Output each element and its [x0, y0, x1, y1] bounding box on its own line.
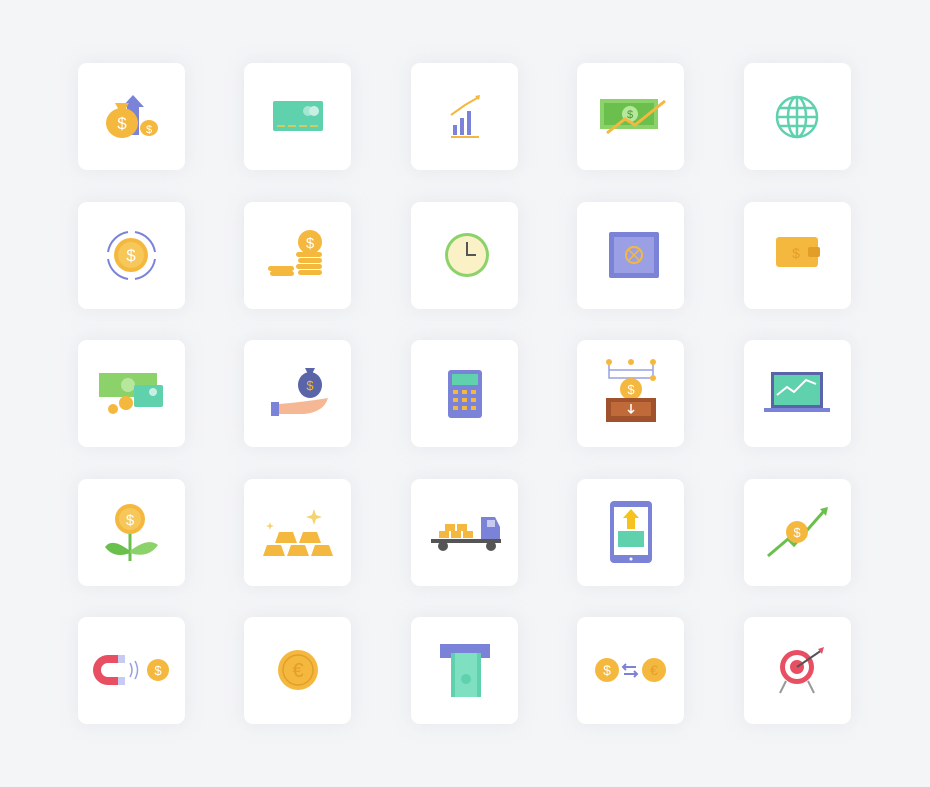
icon: magnet: $ — [154, 663, 162, 678]
icon: coin trend: $ — [793, 525, 801, 540]
icon: money bags: $ — [117, 114, 127, 133]
icon: coin cycle: $ — [126, 246, 136, 265]
card: banknote growth — [577, 63, 684, 170]
icon: cash and card — [99, 373, 163, 414]
icon: exchange: $ — [603, 662, 611, 678]
card: gold truck — [411, 479, 518, 586]
icon: money bags — [106, 95, 158, 138]
card: ATM cash — [411, 617, 518, 724]
icon: coin stacks: $ — [306, 235, 315, 252]
card: currency exchange — [577, 617, 684, 724]
card: coin cycle — [78, 202, 185, 309]
card: credit card — [244, 63, 351, 170]
icon: clock — [445, 233, 489, 277]
icon: truck — [431, 517, 501, 551]
icon: banknote: $ — [627, 109, 633, 121]
card: calculator — [411, 340, 518, 447]
card: euro coin — [244, 617, 351, 724]
card: phone deposit — [577, 479, 684, 586]
card: money bags growth — [78, 63, 185, 170]
icon: chart — [451, 95, 480, 137]
icon: laptop — [764, 372, 830, 412]
icon: exchange — [595, 658, 666, 682]
icon: money bags: $ — [146, 124, 152, 136]
card: laptop chart — [744, 340, 851, 447]
card: clock — [411, 202, 518, 309]
icon: exchange: € — [650, 662, 658, 678]
card: hand with bag — [244, 340, 351, 447]
icon: safe — [609, 232, 659, 278]
card: safe — [577, 202, 684, 309]
icon: euro: € — [292, 660, 304, 682]
icon: gold bars — [263, 509, 333, 556]
icon: wallet: $ — [792, 245, 800, 261]
card: magnet coin — [78, 617, 185, 724]
card: cash and card — [78, 340, 185, 447]
card: bar chart growth — [411, 63, 518, 170]
card: target — [744, 617, 851, 724]
card: globe — [744, 63, 851, 170]
icon: card — [273, 101, 323, 131]
card: gold bars — [244, 479, 351, 586]
icon: hand bag: $ — [306, 378, 314, 393]
card: coin stacks — [244, 202, 351, 309]
card: coin trend — [744, 479, 851, 586]
card: deposit podium — [577, 340, 684, 447]
icon: calculator — [448, 370, 482, 418]
icon: deposit: $ — [627, 382, 635, 397]
icon: money plant: $ — [126, 512, 135, 529]
icon: target — [780, 647, 824, 693]
icon: phone — [610, 501, 652, 563]
card: wallet — [744, 202, 851, 309]
icon: atm — [440, 644, 490, 697]
card: money plant — [78, 479, 185, 586]
icon: globe — [777, 97, 817, 137]
